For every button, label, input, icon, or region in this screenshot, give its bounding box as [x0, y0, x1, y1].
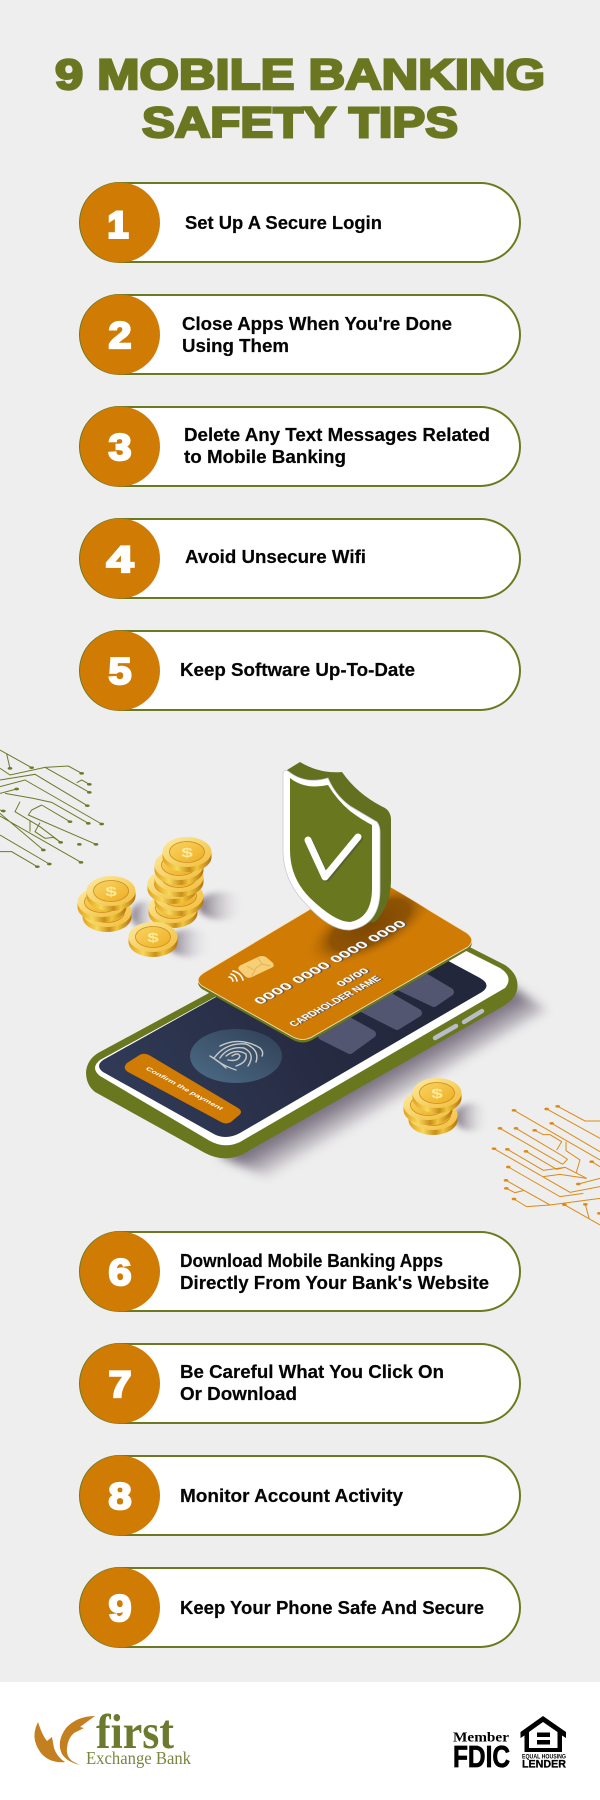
- bank logo: [34, 1704, 191, 1768]
- tip 2: Close Apps When You're Done: [182, 313, 452, 334]
- tip 8: [80, 1456, 520, 1536]
- title: SAFETY TIPS: [142, 99, 458, 147]
- tip 4: Avoid Unsecure Wifi: [185, 546, 366, 567]
- tip 8: Monitor Account Activity: [180, 1485, 404, 1506]
- confirm payment button: [125, 1054, 241, 1124]
- contactless icon: [229, 971, 243, 981]
- tip 1: 1: [108, 204, 128, 246]
- tip 1: [80, 182, 520, 262]
- card chip: [238, 956, 274, 978]
- FDIC badge: Member: [453, 1730, 509, 1744]
- equal housing lender icon: [520, 1716, 566, 1770]
- tip 7: Be Careful What You Click On: [180, 1361, 444, 1382]
- bank logo: first: [96, 1704, 175, 1759]
- phone bezel: [95, 907, 509, 1145]
- shield depth: [287, 762, 391, 925]
- tip 2: Using Them: [182, 335, 289, 356]
- coin stack right: $: [431, 1086, 443, 1101]
- shield icon: [283, 762, 391, 930]
- tip 9: Keep Your Phone Safe And Secure: [180, 1597, 484, 1618]
- credit card: [198, 886, 472, 1042]
- tip 6: 6: [108, 1252, 132, 1293]
- screen cards: [322, 976, 450, 1050]
- tip 6: Download Mobile Banking Apps: [180, 1250, 443, 1271]
- tip 1: Set Up A Secure Login: [185, 212, 382, 233]
- coin stack tall: [148, 837, 212, 928]
- phone illustration: [86, 901, 548, 1178]
- coin stack tall: $: [181, 845, 193, 860]
- tip 4: 4: [106, 539, 134, 580]
- tip 3: 3: [108, 427, 132, 468]
- tip 7: [80, 1344, 520, 1424]
- side buttons: [435, 1011, 482, 1038]
- shield face: [290, 778, 372, 922]
- tip 5: Keep Software Up-To-Date: [180, 659, 415, 680]
- coin shadows: [131, 892, 490, 1131]
- tip 7: Or Download: [180, 1383, 297, 1404]
- tip 6: Directly From Your Bank's Website: [180, 1272, 489, 1293]
- tip 5: 5: [108, 651, 132, 692]
- tip 5: [80, 630, 520, 710]
- equal housing lender icon: EQUAL HOUSING: [522, 1754, 566, 1760]
- circuit lines: green: [0, 750, 104, 868]
- tip 3: [80, 406, 520, 486]
- FDIC badge: [453, 1730, 510, 1774]
- coin stack right: [404, 1078, 462, 1135]
- fingerprint button: [190, 1029, 282, 1083]
- tip 3: to Mobile Banking: [184, 446, 346, 467]
- phone shadow: [218, 985, 548, 1178]
- check mark: [310, 838, 360, 878]
- FDIC badge: FDIC: [453, 1739, 510, 1774]
- circuit lines: orange: [492, 1105, 600, 1225]
- confirm payment button: Confirm the payment: [144, 1066, 225, 1111]
- footer: [0, 1682, 600, 1800]
- single coin: $: [147, 930, 159, 945]
- tip 2: 2: [108, 315, 132, 356]
- coin stack left: [78, 876, 136, 932]
- coin stacks: [78, 837, 490, 1135]
- phone body: [86, 901, 518, 1158]
- tip 7: 7: [108, 1364, 132, 1405]
- bank logo: Exchange Bank: [86, 1748, 191, 1768]
- title: 9 MOBILE BANKING: [55, 51, 545, 99]
- shield border: [283, 770, 380, 930]
- tip 8: 8: [108, 1476, 132, 1517]
- tip 6: [80, 1232, 520, 1312]
- equal housing lender icon: LENDER: [522, 1758, 566, 1770]
- tip 9: 9: [108, 1588, 132, 1629]
- tip 2: [80, 294, 520, 374]
- tip 4: [80, 518, 520, 598]
- tip 9: [80, 1568, 520, 1648]
- card number: 0000 0000 0000 0000: [251, 919, 411, 1007]
- coin stack left: $: [105, 884, 117, 899]
- phone screen: [99, 915, 487, 1137]
- single coin: [128, 922, 178, 957]
- card expiry: 00/00: [333, 966, 372, 988]
- title: [55, 51, 545, 147]
- tip 3: Delete Any Text Messages Related: [184, 424, 490, 445]
- cardholder name: CARDHOLDER NAME: [286, 974, 384, 1028]
- shield shadow on card: [314, 887, 430, 961]
